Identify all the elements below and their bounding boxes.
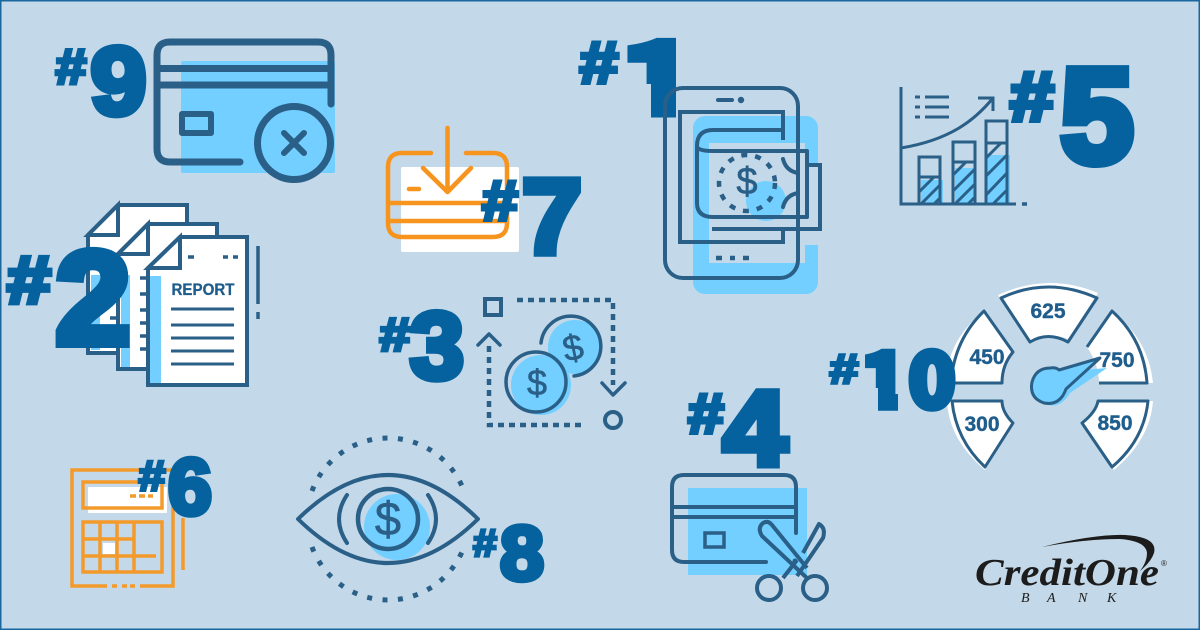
icon: credit card with X [157, 42, 335, 180]
number: #9: # [56, 39, 86, 95]
number: #10: 10 [860, 319, 956, 431]
number: #3 [380, 294, 464, 400]
number: #5: # [1010, 58, 1054, 136]
number: #9: 9 [90, 28, 146, 135]
icon: phone with wallet and cash: $ [736, 161, 758, 203]
icon: eye with dollar [298, 438, 478, 600]
number: #8: # [473, 522, 497, 566]
gauge score labels: 850 [1097, 412, 1133, 435]
icon: bar chart with rising arrow [901, 87, 1027, 204]
number: #6: # [138, 452, 166, 500]
gauge score labels: 750 [1099, 349, 1135, 372]
report heading: REPORT [172, 281, 234, 299]
icon: stacked report pages [88, 205, 258, 385]
logo: Credit One Bank [975, 535, 1167, 606]
gauge score labels [964, 300, 1135, 436]
logo: Credit One Bank: N [1077, 591, 1088, 606]
icon: phone with wallet and cash [665, 88, 820, 294]
icon: coins in dotted cycle: $ [559, 325, 587, 370]
number: #8: 8 [500, 511, 544, 597]
logo: Credit One Bank: CreditOne [975, 552, 1159, 594]
number: #7: # [482, 169, 518, 233]
number: #1: # [580, 30, 618, 96]
number: #5: 5 [1060, 42, 1134, 191]
number: #2 [7, 224, 130, 372]
number: #8 [473, 511, 544, 597]
number: #6 [138, 442, 212, 531]
number: #4: 4 [723, 370, 787, 488]
logo: Credit One Bank: ® [1161, 559, 1167, 568]
number: #2: # [7, 243, 51, 318]
logo: Credit One Bank: B [1021, 591, 1030, 606]
icon: orange calculator [72, 470, 183, 586]
number: #4 [688, 370, 787, 488]
icon: coins in dotted cycle: $ [527, 362, 547, 403]
number: #6: 6 [168, 442, 212, 531]
icon: orange card with download arrow [388, 128, 519, 252]
number: #7 [482, 158, 582, 276]
number: #9 [56, 28, 146, 135]
gauge needle [1032, 358, 1107, 406]
number: #3: 3 [410, 294, 464, 400]
number: #3: # [380, 308, 410, 361]
logo: Credit One Bank: A [1046, 591, 1056, 606]
number: #10: # [830, 346, 858, 392]
number: #4: # [688, 382, 724, 446]
number: #10 [828, 348, 956, 412]
logo: Credit One Bank: K [1106, 591, 1117, 606]
icon: eye with dollar: $ [375, 492, 401, 545]
icon: credit card with scissors [672, 475, 827, 600]
icon: credit score gauge [946, 283, 1153, 470]
number: #7: 7 [522, 158, 582, 276]
gauge score labels: 450 [969, 346, 1005, 369]
number: #1: 1 [618, 0, 704, 143]
gauge score labels: 300 [964, 413, 1000, 436]
number: #2: 2 [56, 224, 130, 372]
icon: coins in dotted cycle [478, 299, 625, 428]
number: #5 [1010, 42, 1134, 191]
gauge score labels: 625 [1030, 300, 1066, 323]
number: #1 [578, 38, 676, 118]
